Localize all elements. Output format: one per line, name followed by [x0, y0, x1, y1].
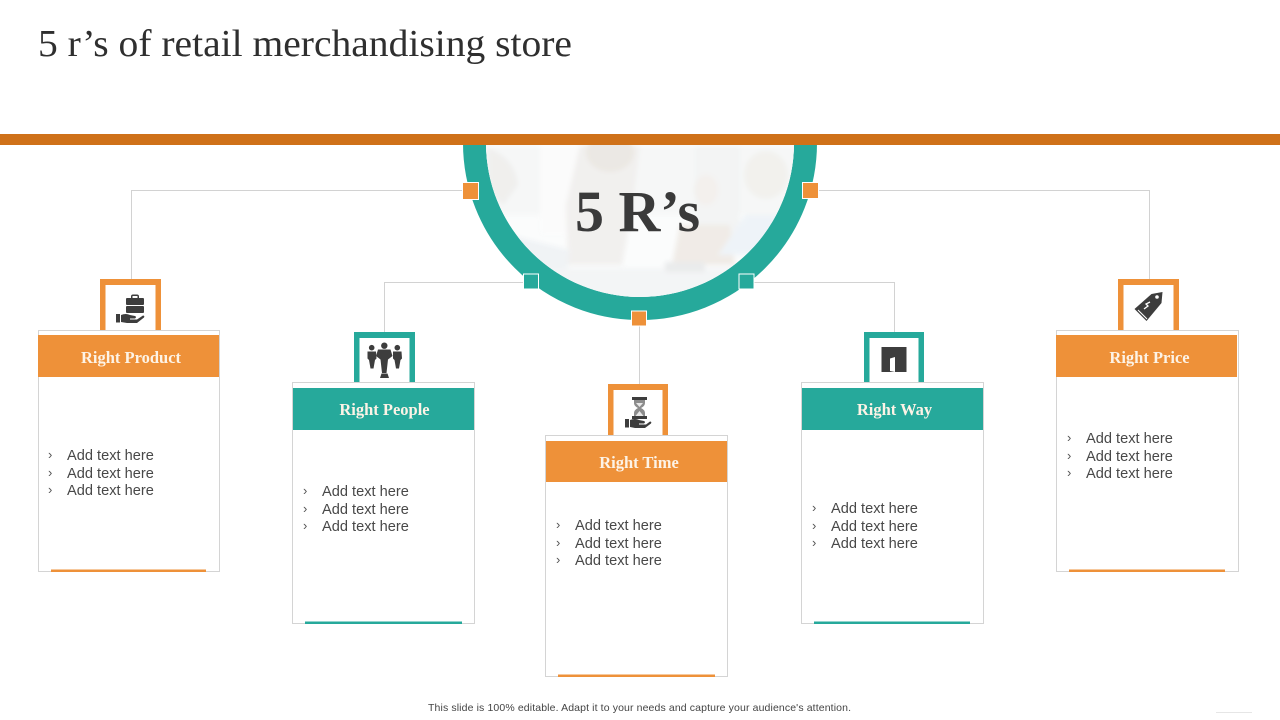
panel: Right People	[292, 332, 474, 624]
accent line	[814, 622, 970, 624]
bullet list: ›	[812, 500, 816, 515]
icon: three people	[368, 342, 402, 378]
bullet list: Add text here	[1086, 449, 1173, 465]
bullet list	[556, 517, 662, 569]
bullet list: ›	[556, 517, 560, 532]
icon frame	[608, 384, 668, 435]
bullet list	[303, 483, 409, 535]
accent line	[1069, 570, 1225, 572]
bullet list: Add text here	[67, 448, 154, 464]
bullet list: ›	[48, 465, 52, 480]
bullet list: ›	[303, 518, 307, 533]
bullet list: Add text here	[831, 501, 918, 517]
icon: open door	[882, 347, 906, 372]
card	[1056, 330, 1238, 572]
bullet list: ›	[556, 552, 560, 567]
panel: Right Product	[38, 279, 220, 572]
card title: Right Price	[1109, 348, 1190, 367]
card title: Right Way	[857, 400, 933, 419]
card title: Right People	[339, 400, 430, 419]
accent line	[305, 622, 462, 624]
card	[38, 330, 220, 572]
bullet list: ›	[48, 447, 52, 462]
accent line	[558, 674, 715, 677]
icon frame	[864, 332, 924, 382]
panel: Right Way	[802, 332, 984, 624]
bullet list: ›	[556, 535, 560, 550]
bullet list: Add text here	[322, 519, 409, 535]
card header	[546, 441, 727, 482]
top orange bar	[0, 134, 1280, 145]
bullet list: Add text here	[322, 484, 409, 500]
bullet list: Add text here	[1086, 431, 1173, 447]
bullet list: Add text here	[67, 466, 154, 482]
connector lines	[132, 190, 1150, 385]
bullet list: Add text here	[575, 536, 662, 552]
card title: Right Product	[81, 348, 182, 367]
icon: hand holding hourglass	[625, 397, 651, 428]
bullet list: ›	[1067, 465, 1071, 480]
card header	[38, 335, 219, 377]
card title: Right Time	[599, 453, 679, 472]
icon frame	[354, 332, 415, 382]
bullet list: ›	[812, 518, 816, 533]
bullet list: Add text here	[575, 553, 662, 569]
title: 5 r’s of retail merchandising store	[38, 23, 572, 65]
panel: Right Price	[1056, 279, 1238, 572]
bullet list	[812, 500, 918, 552]
icon frame	[1118, 279, 1179, 330]
bullet list: ›	[1067, 448, 1071, 463]
icon frame	[100, 279, 161, 330]
bullet list: Add text here	[1086, 466, 1173, 482]
card header	[293, 388, 474, 430]
footer note: This slide is 100% editable. Adapt it to your needs and capture your audience's attention.	[428, 702, 851, 714]
bullet list: Add text here	[831, 519, 918, 535]
central 5 R's circle	[463, 145, 817, 320]
bullet list: ›	[1067, 430, 1071, 445]
panel: Right Time	[546, 384, 728, 677]
card	[292, 382, 474, 624]
bullet list	[1067, 430, 1173, 482]
card	[546, 436, 728, 676]
bullet list: ›	[812, 535, 816, 550]
card	[802, 382, 984, 624]
bullet list: Add text here	[322, 502, 409, 518]
faded photo	[486, 145, 794, 297]
bullet list	[48, 447, 154, 499]
bullet list: ›	[303, 501, 307, 516]
card header	[1056, 335, 1237, 377]
icon: hand holding briefcase	[116, 294, 144, 323]
connector node squares	[462, 182, 818, 326]
bullet list: Add text here	[67, 483, 154, 499]
accent line	[51, 570, 206, 572]
centre heading: 5 R’s	[575, 179, 700, 244]
bullet list: ›	[48, 482, 52, 497]
icon: price tag	[1134, 292, 1162, 321]
card header	[802, 388, 983, 430]
teal ring	[463, 145, 817, 320]
bullet list: Add text here	[831, 536, 918, 552]
bullet list: ›	[303, 483, 307, 498]
bullet list: Add text here	[575, 518, 662, 534]
